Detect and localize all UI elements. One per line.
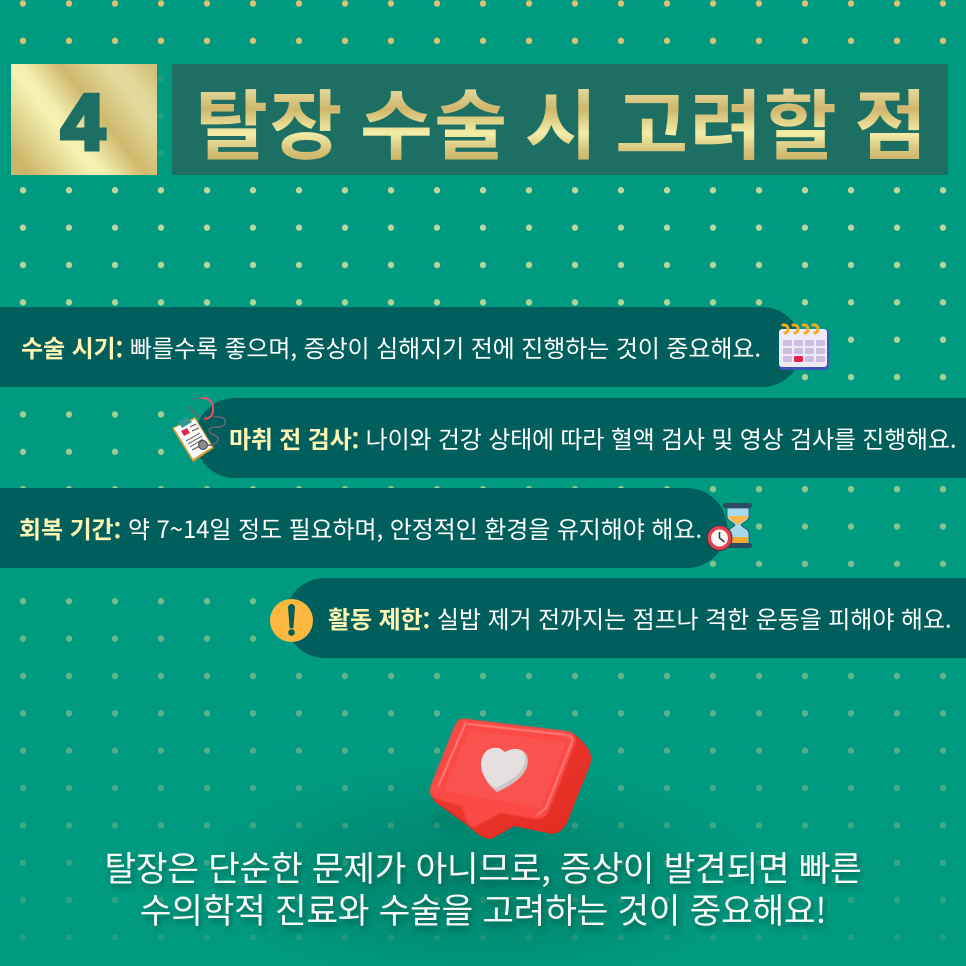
- bar 3: recovery period: [0, 488, 727, 568]
- bar 1 text: 수술 시기: 빠를수록 좋으며, 증상이 심해지기 전에 진행하는 것이 중요해요.: [21, 329, 761, 366]
- closing message: 탈장은 단순한 문제가 아니므로, 증상이 발견되면 빠른: [104, 841, 862, 891]
- bar 3 text: 회복 기간: 약 7~14일 정도 필요하며, 안정적인 환경을 유지해야 해요.: [19, 510, 702, 547]
- title text: 탈장 수술 시 고려할 점: [195, 65, 929, 175]
- bar 2 text: 마취 전 검사: 나이와 건강 상태에 따라 혈액 검사 및 영상 검사를 진행해요.: [229, 420, 956, 457]
- bar 4: activity limits: [285, 578, 966, 658]
- number badge: 4: [11, 64, 157, 175]
- number 4: 4: [61, 78, 105, 166]
- icon: hourglass and clock: [706, 503, 752, 551]
- bar 4 text: 활동 제한: 실밥 제거 전까지는 점프나 격한 운동을 피해야 해요.: [328, 600, 951, 637]
- icon: red speech bubble with heart: [428, 718, 592, 839]
- title panel: [172, 64, 948, 175]
- icon: calendar: [779, 323, 829, 370]
- bar 1: surgery timing: [0, 307, 802, 387]
- closing message: [104, 841, 862, 933]
- bar 2: pre-anesthesia tests: [195, 398, 966, 478]
- icon: exclamation mark: [270, 599, 313, 642]
- closing message: 수의학적 진료와 수술을 고려하는 것이 중요해요!: [140, 883, 826, 933]
- icon: clipboard and stethoscope: [172, 397, 226, 462]
